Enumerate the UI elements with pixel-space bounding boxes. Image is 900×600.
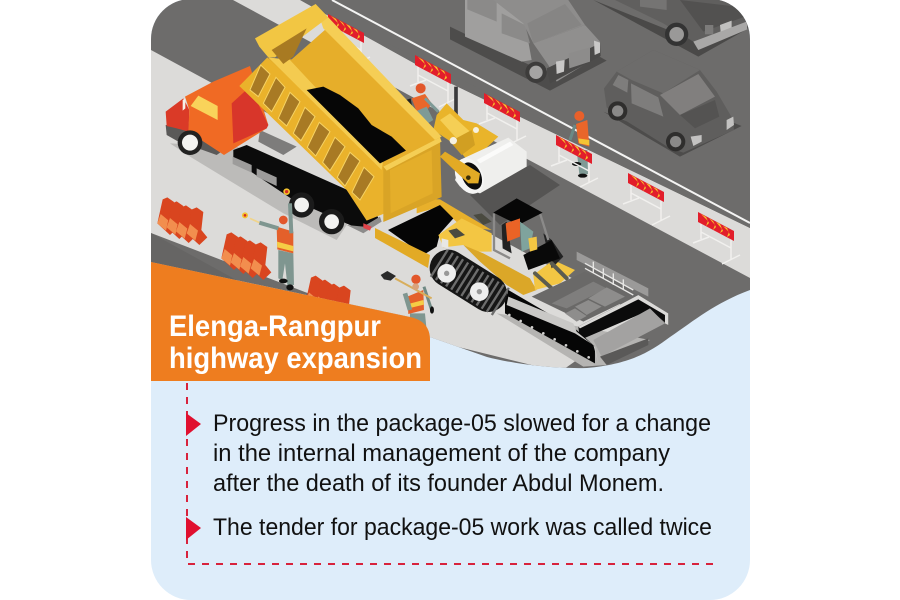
- dump load: [307, 87, 406, 163]
- dump top rim: [255, 4, 328, 57]
- dump interior: [268, 28, 442, 168]
- asphalt paver: [375, 198, 668, 367]
- rear wheels: [289, 192, 314, 218]
- truck chassis: [233, 145, 380, 230]
- tailgate: [383, 137, 442, 222]
- cab: [166, 124, 220, 155]
- hopper: [417, 198, 492, 230]
- road roller: [406, 83, 527, 199]
- dump side: [239, 57, 392, 221]
- bullet 1 marker: [186, 413, 201, 436]
- title: Elenga-Rangpur: [169, 310, 381, 343]
- roller shadow on road: [470, 165, 560, 225]
- worker with barricade: [570, 111, 589, 178]
- dashed bracket: [187, 383, 716, 564]
- road surface: [151, 0, 750, 380]
- cabin: [543, 233, 563, 268]
- gray wedge: [151, 233, 240, 282]
- screed plate: [532, 278, 620, 322]
- bullet 2 marker: [186, 517, 201, 540]
- tracks: [448, 268, 488, 293]
- dark car top right: [593, 0, 748, 57]
- title: [169, 310, 422, 375]
- paver shadow: [497, 313, 650, 367]
- front barricade: [551, 135, 598, 187]
- safety barriers left: [157, 197, 355, 323]
- shovel worker: [381, 271, 434, 330]
- infographic: [151, 0, 750, 600]
- dump truck: [166, 4, 442, 240]
- truck shadow: [170, 143, 363, 240]
- illustration: road scene: [151, 0, 750, 380]
- screed front: [578, 295, 668, 340]
- white lane line: [332, 0, 750, 223]
- road barricades: [323, 14, 740, 264]
- bullet 1 text: [213, 410, 711, 497]
- bullet 2 text: The tender for package-05 work was called twice: [213, 514, 712, 541]
- bullet 1 text: Progress in the package-05 slowed for a change: [213, 410, 711, 437]
- bullet 1 text: in the internal management of the company: [213, 440, 670, 467]
- traffic worker: [242, 188, 294, 290]
- sidewalk band: [233, 0, 750, 278]
- dark strip above sidewalk: [300, 0, 750, 228]
- side windows: [250, 65, 374, 200]
- gray car: [604, 70, 742, 156]
- card background: [151, 0, 750, 600]
- van: [450, 0, 607, 91]
- panel: orange title banner: [151, 262, 430, 381]
- lower pavement: [151, 50, 640, 372]
- screed side: [505, 290, 595, 363]
- title: highway expansion: [169, 342, 422, 375]
- roller driver: [416, 83, 426, 93]
- bullet 1 text: after the death of its founder Abdul Monem.: [213, 470, 664, 497]
